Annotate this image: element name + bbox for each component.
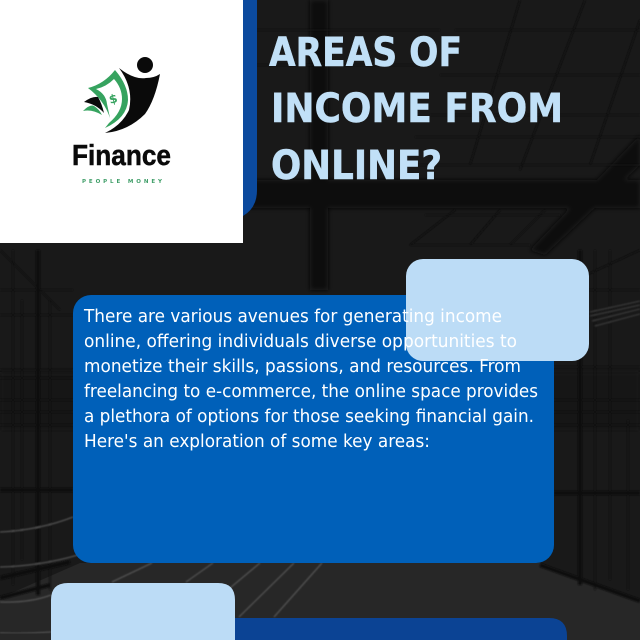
panel: introduction bbox=[73, 259, 589, 563]
logo wordmark: Finance bbox=[72, 140, 171, 172]
title: INCOME FROM bbox=[271, 86, 563, 132]
logo panel bbox=[0, 0, 257, 243]
intro text: Here's an exploration of some key areas: bbox=[84, 432, 430, 452]
intro text: monetize their skills, passions, and resources. From bbox=[84, 357, 521, 377]
logo tagline: PEOPLE MONEY bbox=[82, 179, 163, 185]
panel: next section bbox=[51, 583, 567, 640]
icon: finance logo, figure with banknote: $ bbox=[107, 91, 119, 107]
title bbox=[269, 30, 563, 189]
accent block: bottom left bbox=[51, 583, 235, 640]
icon: finance logo, figure with banknote bbox=[83, 57, 160, 133]
intro text: There are various avenues for generating income bbox=[83, 307, 502, 327]
title: AREAS OF bbox=[269, 30, 462, 76]
accent block: top right bbox=[406, 259, 589, 361]
title: ONLINE? bbox=[271, 143, 442, 189]
intro text: online, offering individuals diverse opportunities to bbox=[84, 332, 517, 352]
intro text: a plethora of options for those seeking financial gain. bbox=[84, 407, 534, 427]
intro text: freelancing to e-commerce, the online space provides bbox=[84, 382, 538, 402]
blue tab behind logo panel bbox=[243, 0, 257, 216]
intro text bbox=[83, 307, 538, 452]
